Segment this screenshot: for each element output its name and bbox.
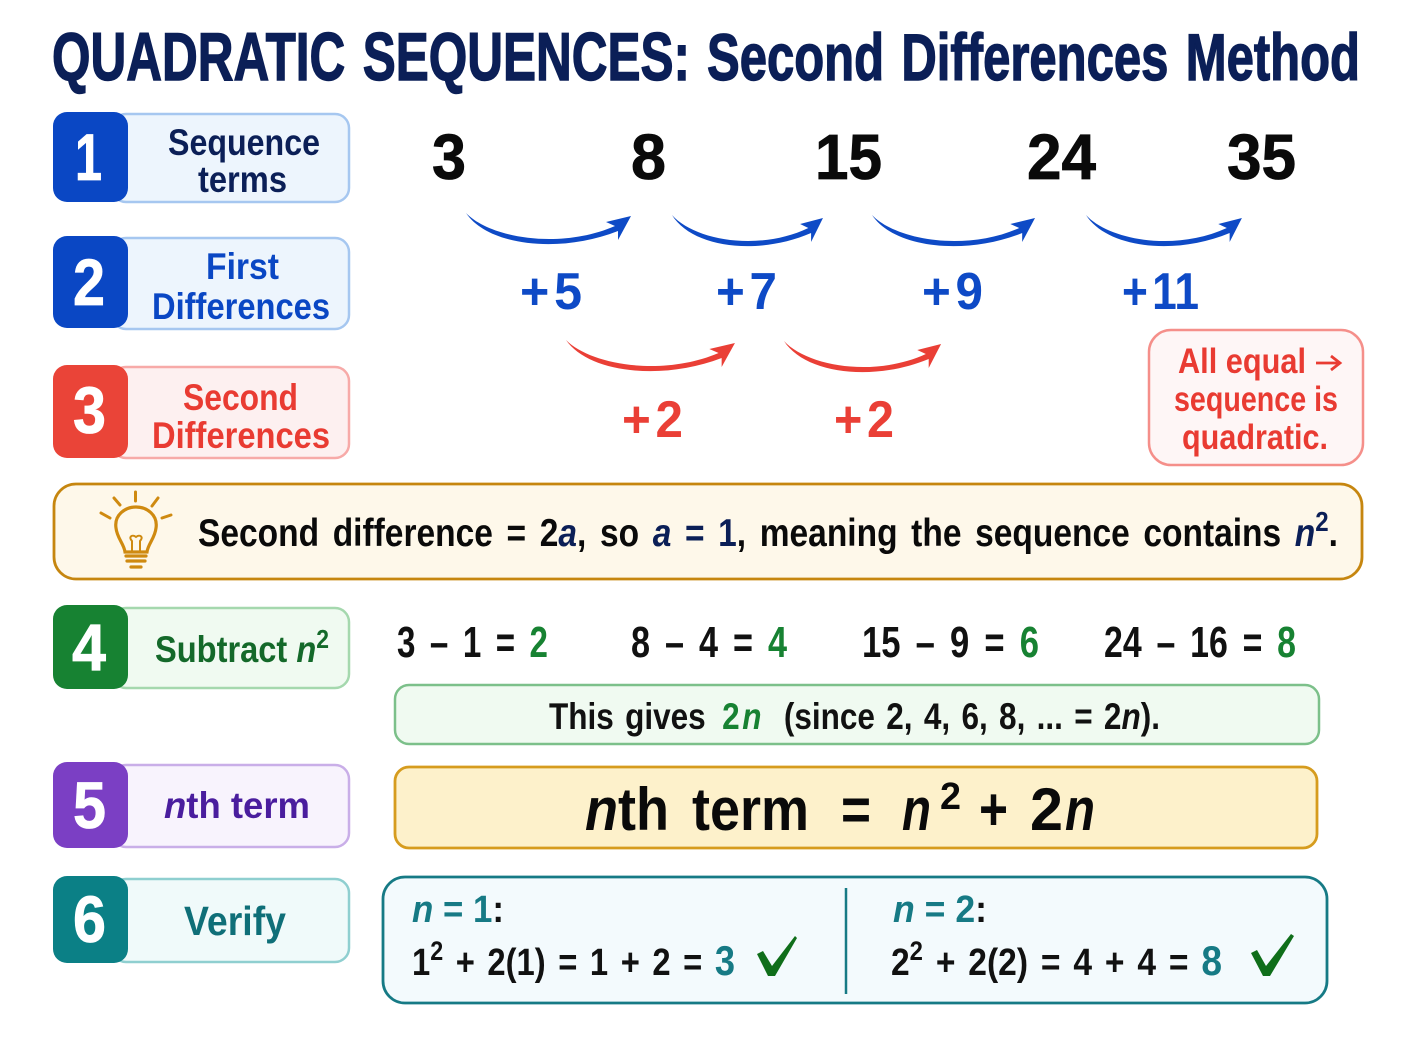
subtraction equations: 24 – 16 = 8 xyxy=(1104,618,1296,667)
arrows: second differences xyxy=(566,340,941,372)
step 6 label: verify: Verify xyxy=(184,898,286,944)
title xyxy=(52,19,1360,95)
second difference values: +2 xyxy=(622,391,683,449)
step 1 label: sequence terms: 1 xyxy=(75,120,102,194)
verify n = 2: 2 xyxy=(891,942,912,984)
key insight banner xyxy=(54,484,1362,579)
verify n = 1: 1 xyxy=(412,942,433,984)
title: QUADRATIC SEQUENCES: xyxy=(52,19,690,95)
verify n = 2: 2 xyxy=(910,936,923,966)
formula box: nth term: 2 xyxy=(940,776,961,818)
verify n = 2: n = 2: xyxy=(893,889,987,931)
second difference values xyxy=(622,391,894,449)
step 1 label: sequence terms xyxy=(53,112,349,202)
verify n = 1 xyxy=(412,889,797,984)
subtraction equations xyxy=(397,618,1296,667)
step 1 label: sequence terms: Sequence xyxy=(168,122,320,163)
verify n = 1: 3 xyxy=(715,937,735,984)
formula box: nth term: term xyxy=(692,776,809,843)
sequence terms row: 3 xyxy=(432,121,466,193)
subtraction equations: 8 – 4 = 4 xyxy=(631,618,787,667)
formula box: nth term: nth xyxy=(585,776,669,843)
verify n = 1: n = 1: xyxy=(412,889,504,931)
formula box: nth term: = xyxy=(841,776,871,843)
first difference values: +7 xyxy=(716,263,777,321)
step 6 label: verify: 6 xyxy=(73,882,106,956)
formula box: nth term: n xyxy=(1065,776,1095,843)
step 5 label: nth term: 5 xyxy=(73,768,106,842)
formula box: nth term xyxy=(395,767,1317,848)
step 5 label: nth term: nth term xyxy=(164,785,310,826)
verify n = 2 xyxy=(891,889,1294,984)
callout: all equal: quadratic. xyxy=(1182,418,1328,457)
first difference values: +5 xyxy=(520,263,582,321)
step 4 label: subtract n squared: Subtract n xyxy=(155,629,319,670)
subtraction equations: 15 – 9 = 6 xyxy=(862,618,1039,667)
verify n = 1: + 2(1) = 1 + 2 = xyxy=(443,942,715,984)
callout: all equal: sequence is xyxy=(1174,380,1338,419)
step 6 label: verify xyxy=(53,876,349,963)
icon: light bulb xyxy=(101,492,171,567)
first difference values: +11 xyxy=(1122,263,1199,321)
subtraction equations: 3 – 1 = 2 xyxy=(397,618,548,667)
callout: all equal xyxy=(1149,330,1363,465)
step 1 label: sequence terms: terms xyxy=(198,159,287,200)
step 3 label: second differences: Differences xyxy=(152,415,330,456)
verify n = 1: 2 xyxy=(430,936,443,966)
step 5 label: nth term xyxy=(53,762,349,848)
formula box: nth term: + xyxy=(979,776,1008,843)
step 2 label: first differences xyxy=(53,236,349,329)
callout: all equal: All equal xyxy=(1178,342,1306,381)
sequence terms row: 15 xyxy=(815,121,882,193)
formula box: nth term: n xyxy=(902,776,931,843)
verify n = 2: + 2(2) = 4 + 4 = xyxy=(923,942,1201,984)
step 4 label: subtract n squared: 4 xyxy=(72,610,106,684)
result box: gives 2n: This gives 2n (since 2, 4, 6, 8, ... = 2n). xyxy=(549,696,1160,737)
step 2 label: first differences: Differences xyxy=(152,286,330,327)
insight text: . xyxy=(1329,512,1338,555)
formula box: nth term: 2 xyxy=(1030,776,1063,843)
step 3 label: second differences xyxy=(53,365,349,458)
result box: gives 2n xyxy=(395,685,1319,744)
sequence terms row: 8 xyxy=(631,121,666,193)
first difference values xyxy=(520,263,1199,321)
insight text: 2 xyxy=(1315,506,1329,537)
step 2 label: first differences: 2 xyxy=(73,245,105,319)
verification panel xyxy=(383,877,1327,1003)
step 3 label: second differences: 3 xyxy=(73,373,106,447)
second difference values: +2 xyxy=(834,391,894,449)
step 3 label: second differences: Second xyxy=(183,377,298,418)
step 4 label: subtract n squared: 2 xyxy=(316,624,329,654)
sequence terms row: 35 xyxy=(1227,121,1296,193)
insight text: Second difference = 2a, so a = 1, meaning the sequence contains n xyxy=(198,512,1370,555)
sequence terms row: 24 xyxy=(1027,121,1096,193)
arrows: first differences xyxy=(466,213,1242,246)
step 4 label: subtract n squared xyxy=(53,605,349,689)
verify n = 2: 8 xyxy=(1201,937,1222,984)
sequence terms row xyxy=(432,121,1296,193)
first difference values: +9 xyxy=(922,263,983,321)
step 2 label: first differences: First xyxy=(206,246,279,287)
